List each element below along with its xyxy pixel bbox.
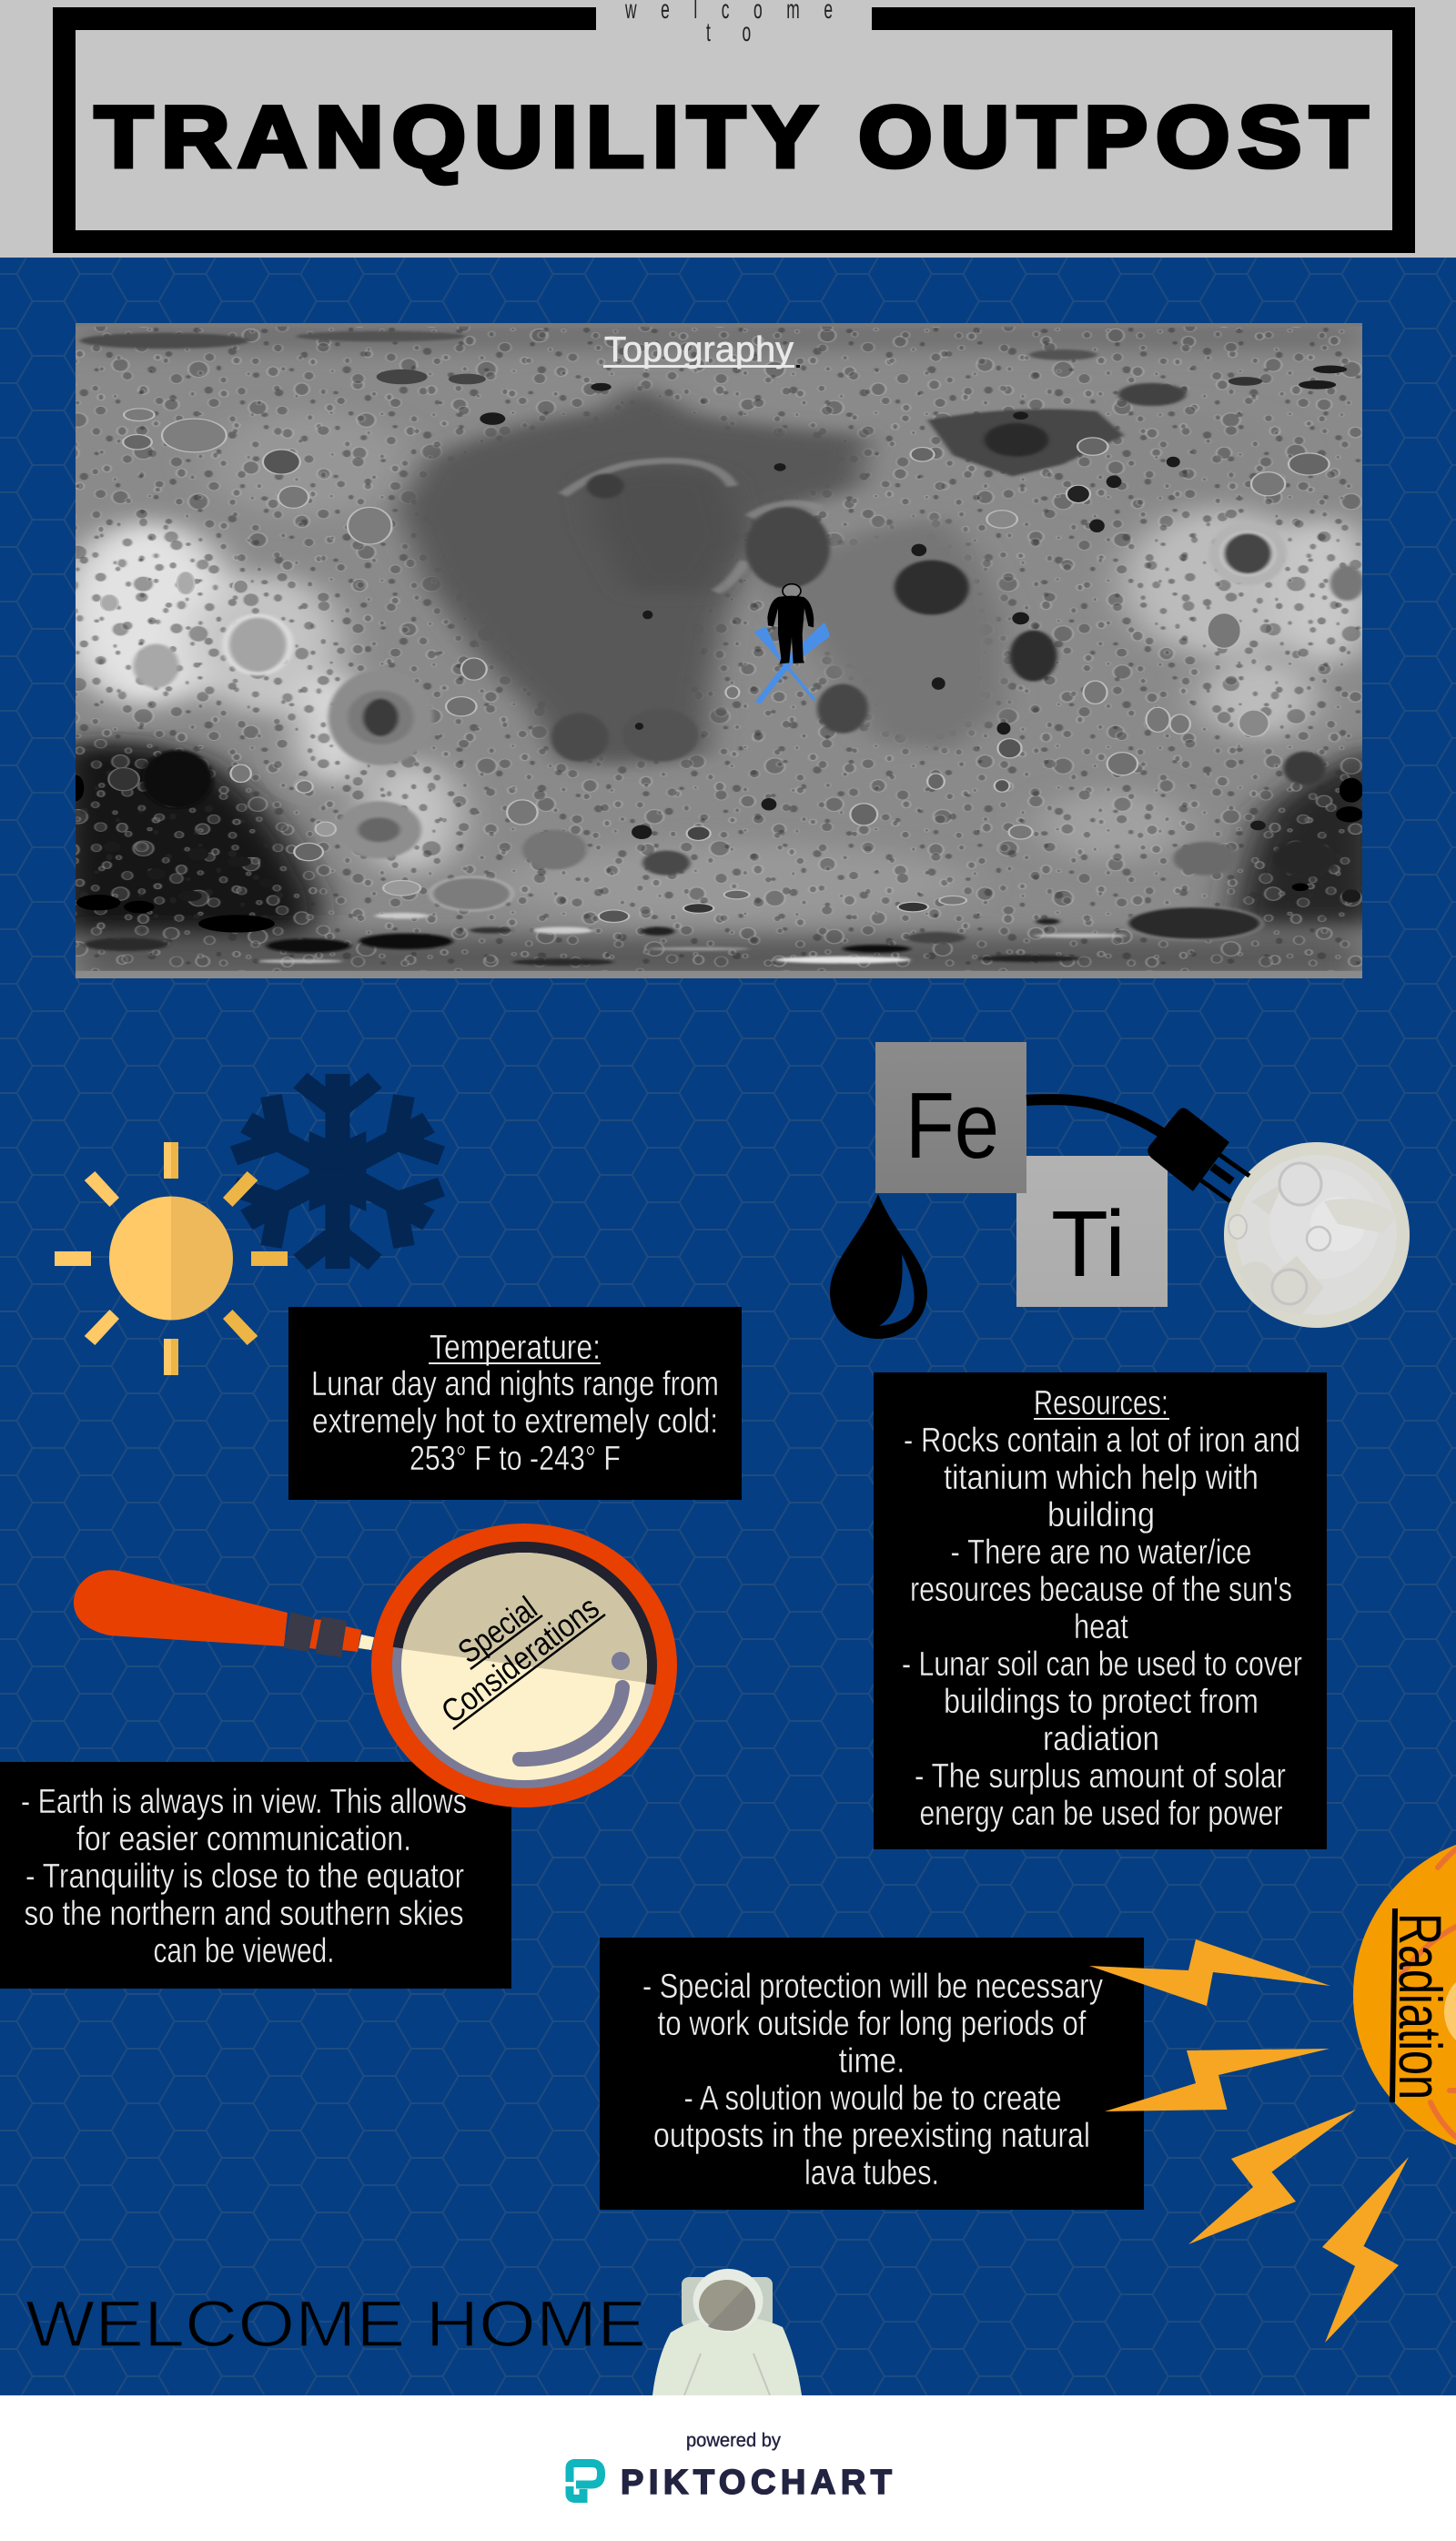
welcome to: to <box>706 18 751 47</box>
special considerations text: for easier communication. <box>76 1820 411 1858</box>
icon: water drop <box>830 1194 927 1339</box>
title frame <box>53 7 1415 253</box>
panel: radiation solutions: lava tubes. <box>804 2154 939 2192</box>
temperature text: extremely hot to extremely cold: <box>312 1402 718 1441</box>
icon: power plug from iron tile to moon <box>1026 1099 1249 1201</box>
icon: radiating sun with label <box>1353 1834 1456 2156</box>
resources text: buildings to protect from <box>944 1683 1259 1721</box>
panel: radiation solutions: - A solution would be to create <box>684 2080 1061 2118</box>
icon: astronaut on crossed blue skis <box>753 584 830 704</box>
panel: special considerations <box>0 1524 677 1989</box>
panel: radiation solutions <box>600 1938 1144 2210</box>
heading: resources: Resources: <box>1034 1384 1168 1422</box>
icon: magnifying glass <box>74 1524 677 1807</box>
panel: resources <box>874 1372 1327 1849</box>
resources text: - The surplus amount of solar <box>915 1757 1286 1796</box>
icon: astronaut portrait <box>652 2269 802 2395</box>
lightning bolts <box>1089 1939 1409 2343</box>
element tile: titanium <box>1016 1156 1168 1307</box>
special considerations text <box>21 1783 467 1970</box>
resources text: heat <box>1074 1608 1128 1646</box>
resources text: - Rocks contain a lot of iron and <box>904 1422 1300 1460</box>
icon: moon <box>1224 1142 1410 1328</box>
piktochart wordmark: PIKTOCHART <box>621 2464 892 2502</box>
special considerations text: - Earth is always in view. This allows <box>21 1783 467 1821</box>
resources text: resources because of the sun's <box>910 1571 1292 1609</box>
welcome to <box>624 0 833 47</box>
special considerations text: - Tranquility is close to the equator <box>25 1858 464 1896</box>
resources text: - Lunar soil can be used to cover <box>902 1645 1302 1684</box>
icon: sun <box>55 1142 288 1375</box>
panel: radiation solutions: outposts in the preexisting natural <box>653 2117 1090 2155</box>
panel: radiation solutions: to work outside for long periods of <box>657 2005 1087 2043</box>
heading: special considerations: Considerations <box>434 1588 606 1730</box>
temperature text: 253° F to -243° F <box>410 1440 621 1478</box>
resources text: titanium which help with <box>944 1459 1259 1497</box>
heading: radiation: Radiation <box>1387 1913 1454 2100</box>
resources text <box>902 1422 1302 1833</box>
map label: Topography: Topography <box>604 330 794 370</box>
temperature text: Lunar day and nights range from <box>311 1365 719 1403</box>
footer <box>0 2395 1456 2541</box>
title: TRANQUILITY OUTPOST <box>95 89 1368 186</box>
element tile: iron: Fe <box>905 1073 999 1178</box>
panel: radiation solutions: time. <box>839 2042 905 2080</box>
element tile: iron <box>875 1042 1026 1193</box>
element tile: titanium: Ti <box>1051 1191 1126 1296</box>
special considerations text: so the northern and southern skies <box>24 1895 464 1933</box>
resources text: building <box>1047 1496 1155 1534</box>
heading: temperature: Temperature: <box>430 1329 601 1367</box>
resources text: energy can be used for power <box>919 1795 1283 1833</box>
resources text: radiation <box>1043 1720 1159 1758</box>
panel: radiation solutions: - Special protection will be necessary <box>642 1968 1103 2006</box>
closing text: welcome home: WELCOME HOME <box>25 2288 646 2361</box>
topography map panel <box>55 323 1385 979</box>
header band <box>0 0 1456 258</box>
panel: temperature <box>288 1307 742 1500</box>
heading: special considerations: Special <box>451 1589 543 1670</box>
powered by: powered by <box>686 2430 781 2451</box>
resources text: - There are no water/ice <box>950 1534 1252 1572</box>
icon: snowflake <box>228 1074 448 1269</box>
icon: piktochart logo <box>570 2463 601 2499</box>
temperature text <box>311 1365 719 1478</box>
special considerations text: can be viewed. <box>153 1932 335 1970</box>
